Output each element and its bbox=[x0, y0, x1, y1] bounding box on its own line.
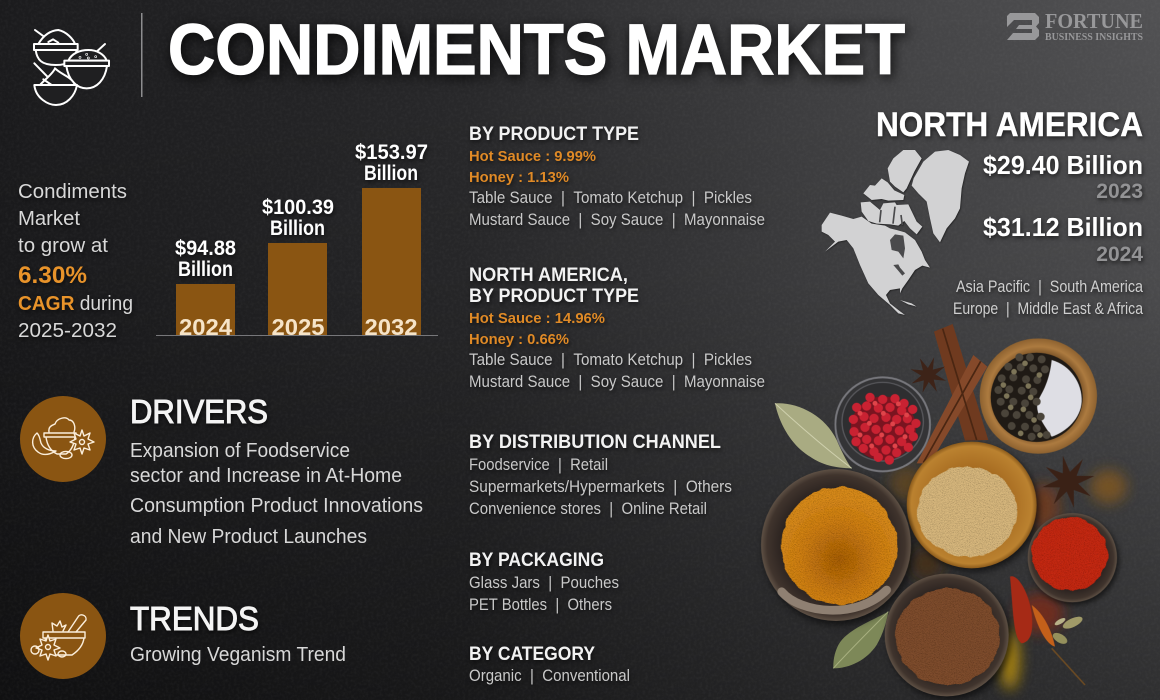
bar chart: market size: Billion bbox=[364, 161, 418, 185]
glass bowl with pink peppercorns bbox=[835, 377, 930, 471]
CAGR text block: Condiments bbox=[18, 180, 127, 203]
spice dust bbox=[890, 467, 1127, 690]
logo: Fortune Business Insights bbox=[1007, 9, 1143, 43]
panel: by distribution channel: BY DISTRIBUTION CHANNEL bbox=[469, 432, 721, 453]
panel: North America values bbox=[876, 106, 1144, 318]
panel: drivers: Consumption Product Innovations bbox=[130, 494, 423, 517]
panel: by product type: Hot Sauce : 9.99% bbox=[469, 148, 596, 165]
panel: drivers: and New Product Launches bbox=[130, 525, 367, 548]
map: North America bbox=[822, 150, 969, 315]
panel: by product type: BY PRODUCT TYPE bbox=[469, 124, 639, 145]
panel: by distribution channel bbox=[469, 432, 732, 518]
star anise: large bbox=[1037, 450, 1100, 513]
logo: Fortune Business Insights: BUSINESS INSIGHTS bbox=[1045, 32, 1143, 43]
panel: by category bbox=[469, 644, 630, 685]
panel: by distribution channel: Supermarkets/Hypermarkets | Others bbox=[469, 478, 732, 496]
cinnamon sticks bbox=[917, 324, 988, 463]
title: CONDIMENTS MARKET bbox=[168, 11, 905, 90]
bar chart: market size bbox=[156, 140, 438, 340]
panel: by product type: Table Sauce | Tomato Ketchup | Pickles bbox=[469, 189, 752, 207]
leaf: top bbox=[775, 403, 852, 468]
icon: condiment bowls bbox=[34, 30, 109, 105]
panel: North America by product type bbox=[469, 265, 765, 391]
CAGR text block: 6.30% bbox=[18, 262, 87, 289]
CAGR text block: Market bbox=[18, 207, 80, 230]
panel: North America by product type: NORTH AMERICA, bbox=[469, 265, 628, 286]
panel: by product type bbox=[469, 124, 765, 229]
panel: by category: Organic | Conventional bbox=[469, 667, 630, 685]
panel: North America by product type: Hot Sauce : 14.96% bbox=[469, 310, 605, 327]
panel: North America values: NORTH AMERICA bbox=[876, 106, 1143, 144]
panel: by packaging bbox=[469, 550, 619, 614]
star anise: small bbox=[905, 351, 952, 399]
tan bowl with ginger powder bbox=[907, 442, 1037, 568]
panel: by product type: Mustard Sauce | Soy Sauce | Mayonnaise bbox=[469, 211, 765, 229]
panel: trends: Growing Veganism Trend bbox=[130, 643, 346, 666]
wooden bowl with pepper and salt bbox=[980, 338, 1097, 454]
bar chart: market size: 2024 bbox=[179, 314, 232, 340]
panel: North America values: 2024 bbox=[1096, 243, 1143, 266]
panel: North America values: 2023 bbox=[1096, 180, 1143, 203]
panel: North America values: $29.40 Billion bbox=[983, 150, 1143, 180]
panel: North America by product type: Honey : 0.66% bbox=[469, 331, 569, 348]
panel: North America by product type: Mustard Sauce | Soy Sauce | Mayonnaise bbox=[469, 373, 765, 391]
metal bowl with curry powder bbox=[761, 469, 911, 621]
panel: drivers bbox=[20, 393, 423, 548]
divider bbox=[141, 13, 142, 97]
panel: by category: BY CATEGORY bbox=[469, 644, 595, 665]
panel: North America by product type: Table Sauce | Tomato Ketchup | Pickles bbox=[469, 351, 752, 369]
CAGR text block: CAGR during bbox=[18, 292, 133, 315]
panel: by packaging: Glass Jars | Pouches bbox=[469, 574, 619, 592]
bar chart: market size: $100.39 bbox=[262, 195, 334, 219]
panel: drivers: DRIVERS bbox=[130, 393, 268, 430]
panel: by packaging: PET Bottles | Others bbox=[469, 596, 612, 614]
bar chart: market size: $153.97 bbox=[355, 140, 428, 164]
panel: North America by product type: BY PRODUCT TYPE bbox=[469, 286, 639, 307]
panel: drivers: Expansion of Foodservice bbox=[130, 439, 350, 462]
panel: by product type: Honey : 1.13% bbox=[469, 169, 569, 186]
bar chart: market size: Billion bbox=[178, 257, 233, 281]
CAGR text block bbox=[18, 180, 133, 342]
bar chart: market size: 2032 bbox=[364, 314, 418, 340]
CAGR text block: 2025-2032 bbox=[18, 319, 117, 342]
panel: by packaging: BY PACKAGING bbox=[469, 550, 604, 571]
panel: North America values: $31.12 Billion bbox=[983, 212, 1143, 242]
metal bowl with brown spice bbox=[885, 574, 1009, 696]
dried chilies and cardamom bbox=[1010, 576, 1085, 685]
logo: Fortune Business Insights: FORTUNE bbox=[1045, 9, 1143, 33]
leaf: bottom bbox=[833, 612, 888, 668]
panel: drivers: sector and Increase in At-Home bbox=[130, 464, 402, 487]
bar chart: market size: $94.88 bbox=[175, 236, 236, 260]
panel: trends: TRENDS bbox=[130, 600, 259, 637]
panel: by distribution channel: Convenience stores | Online Retail bbox=[469, 500, 707, 518]
small bowl with red chili powder bbox=[1028, 513, 1117, 602]
panel: trends bbox=[20, 593, 346, 679]
image: spice bowls bbox=[761, 324, 1127, 696]
bar chart: market size: 2025 bbox=[272, 314, 325, 340]
bar chart: market size: Billion bbox=[270, 216, 325, 240]
CAGR text block: to grow at bbox=[18, 234, 108, 257]
panel: by distribution channel: Foodservice | Retail bbox=[469, 456, 608, 474]
